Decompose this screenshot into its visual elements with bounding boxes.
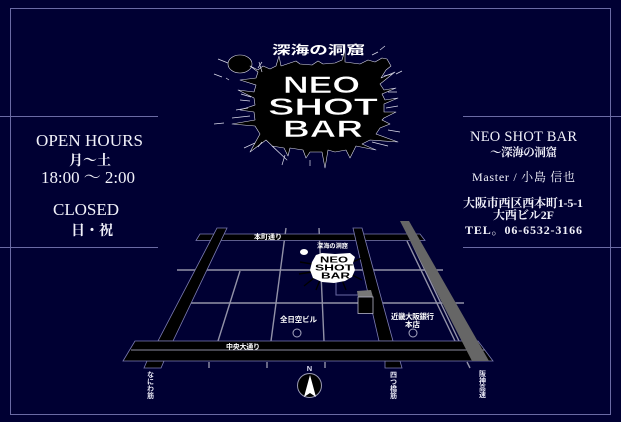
label: Naniwa-suji: なにわ筋 xyxy=(146,371,154,400)
map xyxy=(123,221,493,400)
mini logo: BAR xyxy=(321,270,350,280)
mini logo: SHOT xyxy=(315,262,354,272)
thin streets xyxy=(177,228,470,368)
logo: ink splash with bar name xyxy=(214,42,402,168)
road: Honmachi-dori xyxy=(196,234,425,240)
text block: bar details: 〜深海の洞窟 xyxy=(490,145,557,159)
marker: Kinki Osaka Bank xyxy=(409,329,417,337)
label: ANA building: 全日空ビル xyxy=(280,314,318,324)
icon: ink splash blob xyxy=(232,50,398,168)
label: Honmachi-dori: 本町通り xyxy=(254,232,282,241)
road: Hanshin expressway xyxy=(400,221,489,361)
label: Hanshin expressway: 阪神高速 xyxy=(478,370,486,399)
label: Yotsubashi-suji: 四つ橋筋 xyxy=(390,371,397,400)
master: Master / 小島 信也 xyxy=(472,169,575,184)
logo text: NEO: NEO xyxy=(283,72,360,99)
text block: bar details xyxy=(463,129,583,237)
text block: opening hours: 日・祝 xyxy=(71,222,113,239)
road: Naniwa-suji xyxy=(144,228,227,368)
logo text: SHOT: SHOT xyxy=(268,94,379,121)
mini logo: NEO xyxy=(320,254,349,264)
heading: closed: CLOSED xyxy=(53,200,119,219)
map: 本店 xyxy=(405,319,420,329)
road: Yotsubashi-suji xyxy=(353,228,402,368)
icon: north compass: N xyxy=(307,364,312,373)
building: bar location xyxy=(357,290,373,314)
text block: bar details: 大西ビル2F xyxy=(493,207,554,222)
label: Chuo-odori: 中央大通り xyxy=(226,342,260,351)
logo heading: 深海の洞窟 xyxy=(272,42,365,57)
mini logo xyxy=(299,242,362,290)
road: Chuo-odori xyxy=(123,341,493,361)
logo text: BAR: BAR xyxy=(283,116,363,143)
icon: small ink blot xyxy=(228,55,252,73)
heading: open hours: OPEN HOURS xyxy=(36,131,143,150)
text block: opening hours: 18:00 〜 2:00 xyxy=(41,168,135,187)
telephone: TEL。06-6532-3166 xyxy=(465,223,582,237)
text block: opening hours: 月〜土 xyxy=(69,152,111,169)
splash droplets xyxy=(214,46,402,166)
address: 大阪市西区西本町1-5-1 xyxy=(463,195,583,210)
mini logo: 深海の洞窟 xyxy=(317,242,348,250)
bar name: NEO SHOT BAR xyxy=(470,129,577,145)
icon: north compass xyxy=(298,364,322,398)
text block: opening hours xyxy=(36,131,143,239)
marker: ANA building xyxy=(293,329,301,337)
label: Kinki Osaka Bank: 近畿大阪銀行 xyxy=(391,311,434,321)
